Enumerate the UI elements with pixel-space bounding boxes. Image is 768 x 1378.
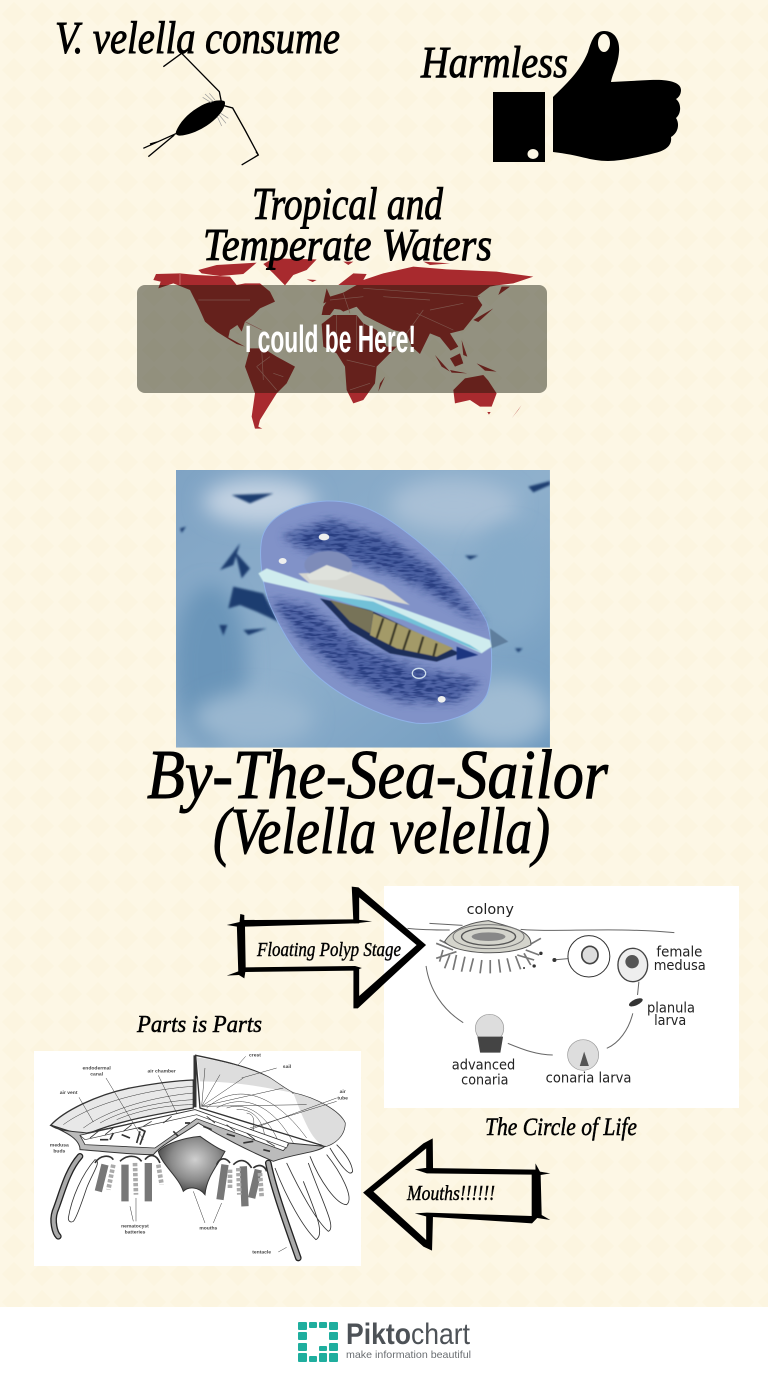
polyps [95, 1156, 267, 1171]
anatomy labels: tube [337, 1095, 348, 1101]
anatomy labels: air chamber [148, 1068, 176, 1074]
cycle labels: colony [467, 902, 514, 918]
anatomy labels: crest [249, 1052, 261, 1058]
water shadows [180, 481, 550, 652]
anatomy labels: mouths [199, 1226, 218, 1232]
anatomy labels: nematocyst [121, 1223, 149, 1229]
brown polyp underside [258, 551, 508, 662]
anatomy labels: air vent [60, 1090, 78, 1096]
caption: The Circle of Life: The Circle of Life [485, 1114, 637, 1141]
anatomy labels: batteries [125, 1229, 146, 1235]
heading: Harmless: Harmless [420, 38, 568, 87]
leaders [79, 1056, 337, 1252]
central mouth [158, 1136, 225, 1195]
cycle labels: conaria [461, 1073, 508, 1089]
float disc [261, 501, 492, 723]
pale body and bubble [298, 572, 410, 605]
tentacles [54, 1156, 80, 1236]
anatomy labels: tentacle [252, 1250, 271, 1256]
cycle labels: medusa [654, 958, 706, 974]
cycle labels: conaria larva [546, 1070, 631, 1086]
heading: Tropical and Temperate Waters: Temperate Waters [203, 219, 492, 270]
heading: V. velella consume: V. velella consume [55, 12, 340, 63]
anatomy labels: canal [90, 1071, 104, 1077]
main title: (Velella velella) [213, 795, 550, 868]
anatomy labels: endodermal [83, 1065, 111, 1071]
colony [436, 938, 541, 973]
world map [153, 258, 533, 429]
logo wordmark: Piktochart [346, 1318, 471, 1351]
anatomy labels [50, 1052, 348, 1256]
panel: anatomy diagram [34, 1051, 361, 1266]
main title [147, 737, 609, 868]
foam spots [279, 534, 446, 703]
photo: Velella velella [173, 470, 550, 748]
cycle labels: planula [647, 1000, 695, 1016]
planula [628, 997, 644, 1008]
heading: Tropical and Temperate Waters [203, 178, 492, 270]
icon: copepod [143, 53, 258, 165]
anatomy labels: sail [283, 1064, 292, 1070]
left lobes [68, 1160, 97, 1222]
caption: Parts is Parts: Parts is Parts [136, 1012, 262, 1038]
footer [0, 1307, 768, 1378]
waterline and arrows [407, 923, 674, 1055]
heading: Tropical and Temperate Waters: Tropical and [252, 178, 444, 229]
sail [258, 568, 492, 653]
anatomy labels: medusa [50, 1143, 69, 1149]
conaria larva [568, 1040, 599, 1070]
callout: I could be Here! [137, 285, 547, 393]
panel: life cycle diagram [384, 886, 739, 1108]
chamber band [51, 1110, 325, 1161]
cycle labels: larva [654, 1013, 686, 1029]
callout: I could be Here!: I could be Here! [245, 319, 416, 361]
female medusa [618, 948, 648, 982]
arrow: floating polyp stage [227, 887, 426, 1008]
arrow: floating polyp stage: Floating Polyp Stage [256, 939, 401, 961]
cycle labels: advanced [452, 1057, 515, 1073]
icon: thumbs up [493, 31, 681, 162]
logo tagline: make information beautiful [346, 1349, 471, 1361]
cycle labels: female [656, 945, 702, 961]
arrow: mouths [363, 1138, 550, 1251]
anatomy labels: air [340, 1089, 346, 1095]
float and sail [51, 1080, 193, 1135]
arrow: mouths: Mouths!!!!!! [406, 1181, 495, 1205]
anatomy labels: buds [53, 1149, 66, 1155]
icon: Piktochart logo [298, 1322, 338, 1362]
main title: By-The-Sea-Sailor [147, 737, 609, 814]
advanced conaria [475, 1014, 504, 1042]
cycle labels [452, 902, 706, 1089]
medusa circle [568, 936, 610, 977]
right lobes [275, 1145, 353, 1240]
